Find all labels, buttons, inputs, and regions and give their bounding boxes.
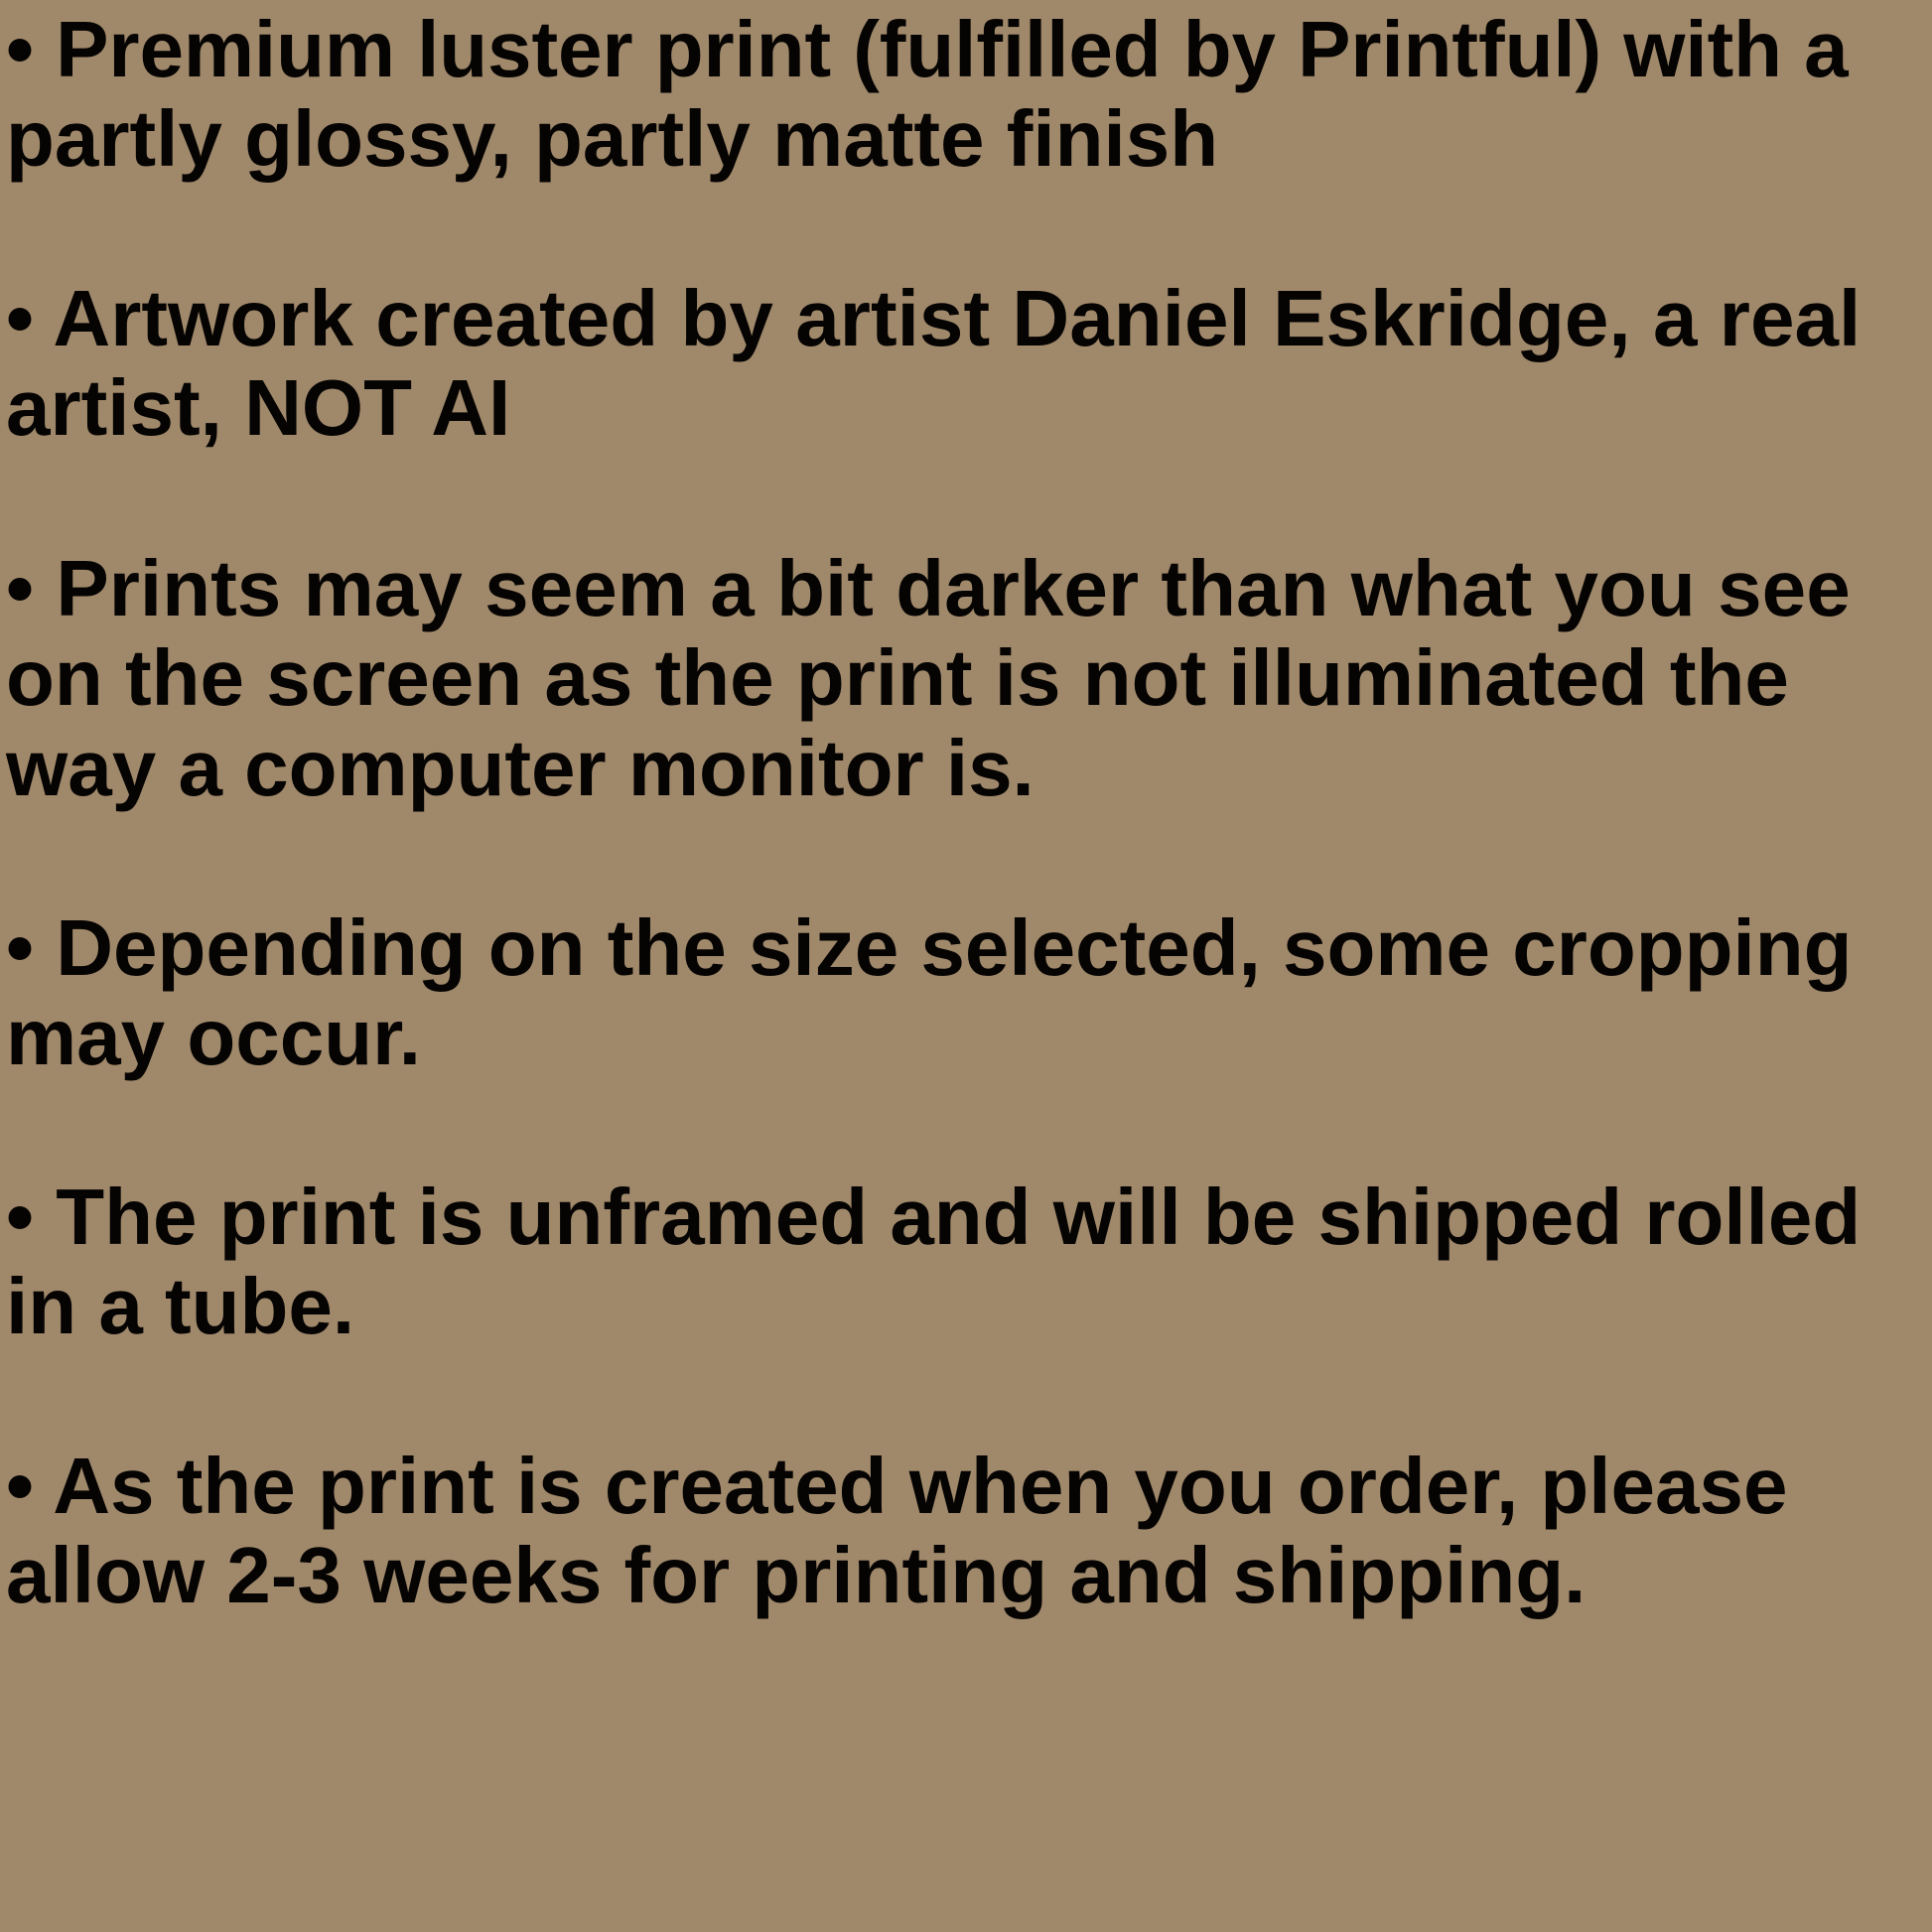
bullet: unframed and rolled: • The print is unframed and will be shipped rolled in a tube. <box>6 1173 1861 1350</box>
bullet: prints may seem darker: • Prints may seem a bit darker than what you see on the screen as the print is not illuminated the way a computer monitor is. <box>6 544 1851 812</box>
bullet: artwork by Daniel Eskridge: • Artwork created by artist Daniel Eskridge, a real artist, NOT AI <box>6 274 1861 452</box>
bullet: printing and shipping time: • As the print is created when you order, please allow 2-3 weeks for printing and shipping. <box>6 1442 1787 1619</box>
bullet: premium luster print: • Premium luster print (fulfilled by Printful) with a partly glossy, partly matte finish <box>6 5 1849 183</box>
bullet: cropping may occur: • Depending on the size selected, some cropping may occur. <box>6 903 1852 1081</box>
